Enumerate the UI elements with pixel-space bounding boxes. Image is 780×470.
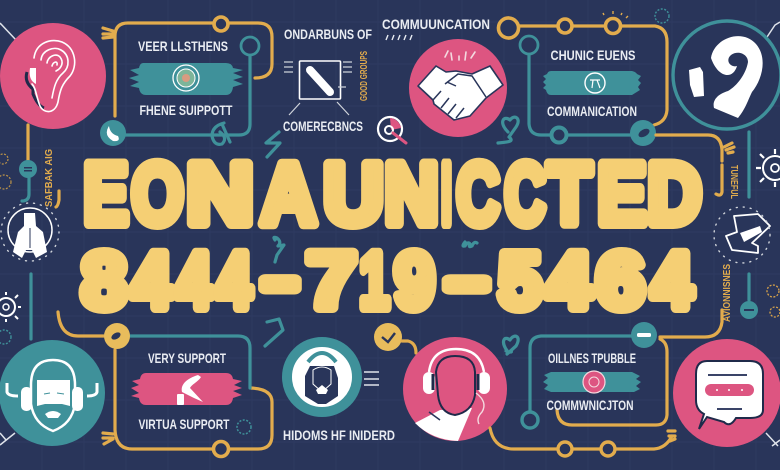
icon: man with headphones [0,340,105,446]
icon: clasped hands right [714,207,770,263]
gold fork [103,433,113,444]
subheading: VIRTUA SUPPORT [138,416,230,432]
gold ring [214,442,228,456]
title: A [260,146,316,242]
main gold right connector [656,135,722,161]
phone number: 4 [652,236,693,324]
title: E [598,146,646,242]
gold connector top left [115,23,272,116]
gold bottom connector [490,428,672,449]
teal node with crescent [100,120,126,146]
teal ring node [241,37,259,55]
gold open ring [601,442,615,456]
teal heart ornament [504,336,518,354]
gold right connector [660,310,722,337]
teal ornament [655,9,669,23]
panel: chronic events [498,9,669,146]
icon: person in ring [1,203,59,261]
teal ornament [0,330,11,344]
gold check node [374,323,402,351]
panel: online trouble [490,310,722,456]
teal heart ornament [498,117,518,143]
title: C [504,146,546,242]
teal bolt [265,319,283,346]
label: hidoms: HIDOMS HF INIDERD [283,427,395,443]
teal stem [29,274,33,339]
title: N [384,146,438,242]
teal connector [529,54,632,135]
heading: CHUNIC EUENS [550,47,636,63]
gold stem [26,125,30,160]
phone number: 1 [360,236,390,324]
gold suns [0,154,11,189]
icon: gear left [0,292,21,322]
teal banner [543,71,641,95]
gold hook right [716,165,722,195]
teal ring [522,412,538,428]
title: I [441,146,452,242]
heading: communication: COMMUUNCATION [382,16,490,32]
teal node with bar [631,322,657,348]
gold connector with rings [515,26,667,125]
teal connector [530,336,632,412]
teal hook [22,178,29,201]
gold box connector [557,339,667,425]
gold open ring [558,442,572,456]
panel: conferencing [266,26,372,157]
title: O [132,146,184,242]
icon: gear right [756,149,780,187]
phone number: 4 [132,236,172,324]
icon: speech bubble in pink circle [673,339,780,447]
teal node right [740,301,758,319]
icon: screen [284,61,352,115]
icon: head in teal ring [287,342,379,412]
gold sun ornaments right [767,285,780,317]
gold ring node [498,18,519,38]
gold fork [103,28,113,38]
phone number: 4 [216,236,252,324]
panel: virtual support [58,312,283,456]
heading: ONDARBUNS OF [284,26,372,42]
teal ring [520,36,538,54]
vertical gold micro text right bottom: AVIONNISNES [722,264,733,322]
teal bolt [266,132,280,157]
gold open ring [558,19,572,33]
subheading: COMMWNICJTON [546,397,634,413]
teal connector [130,336,250,388]
teal stem right [747,274,751,300]
title: C [456,146,500,242]
teal swirl ornament [212,123,230,144]
phone number: 6 [596,236,644,324]
title [84,146,702,242]
gold fork right top [724,143,734,153]
icon: ear in pink circle [0,23,106,129]
phone number: - [446,233,488,322]
label: COMERECBNCS [283,118,363,134]
panel: left side icons [0,125,59,344]
heading: communication [382,16,490,40]
subheading: COMMANICATION [547,103,637,119]
phone number: - [262,233,298,322]
title: T [548,146,592,242]
teal banner [129,63,243,95]
teal node with leaf [630,120,656,146]
icon: person with headset in pink circle [403,337,507,441]
title: N [186,146,254,242]
gold fork [668,431,675,441]
vertical gold text: SAFBAK AIG [44,149,55,207]
icon: handshake in pink circle [409,39,507,137]
teal sun ornament [237,420,251,434]
title: U [324,146,384,242]
gold node with leaf [104,323,130,349]
teal banner [543,371,641,393]
phone number: 7 [306,236,356,324]
teal vertical right [747,132,751,197]
icon: target search [378,117,406,143]
gold connector short [402,341,416,353]
gold ring node [214,17,228,31]
phone number: 8 [82,236,126,324]
subheading: FHENE SUIPPOTT [140,102,233,118]
gold ring with rays [603,11,628,34]
phone number: 5 [498,236,542,324]
teal connector [125,55,250,135]
panel: peer listens [100,17,272,146]
gold connector box [115,350,272,449]
phone number [82,233,693,324]
teal node [19,160,37,178]
heading: OILLNES TPUBBLE [548,350,636,366]
vertical gold micro text right top: TUNEFUL [728,165,739,199]
phone number: 4 [176,236,212,324]
heading: VERY SUPPORT [148,350,226,366]
heading: VEER LLSTHENS [138,38,228,54]
pink banner [131,373,242,405]
title: E [84,146,128,242]
title: D [648,146,702,242]
vertical gold micro text: GOOD GROUPS [359,51,370,101]
gold hook [56,191,59,207]
gold connector left [58,312,106,336]
teal squiggle ornaments centre [274,237,477,262]
phone number: 9 [394,236,434,324]
icon: ear outline circle [673,21,780,129]
phone number: 4 [546,236,592,324]
teal ring center [552,128,566,142]
